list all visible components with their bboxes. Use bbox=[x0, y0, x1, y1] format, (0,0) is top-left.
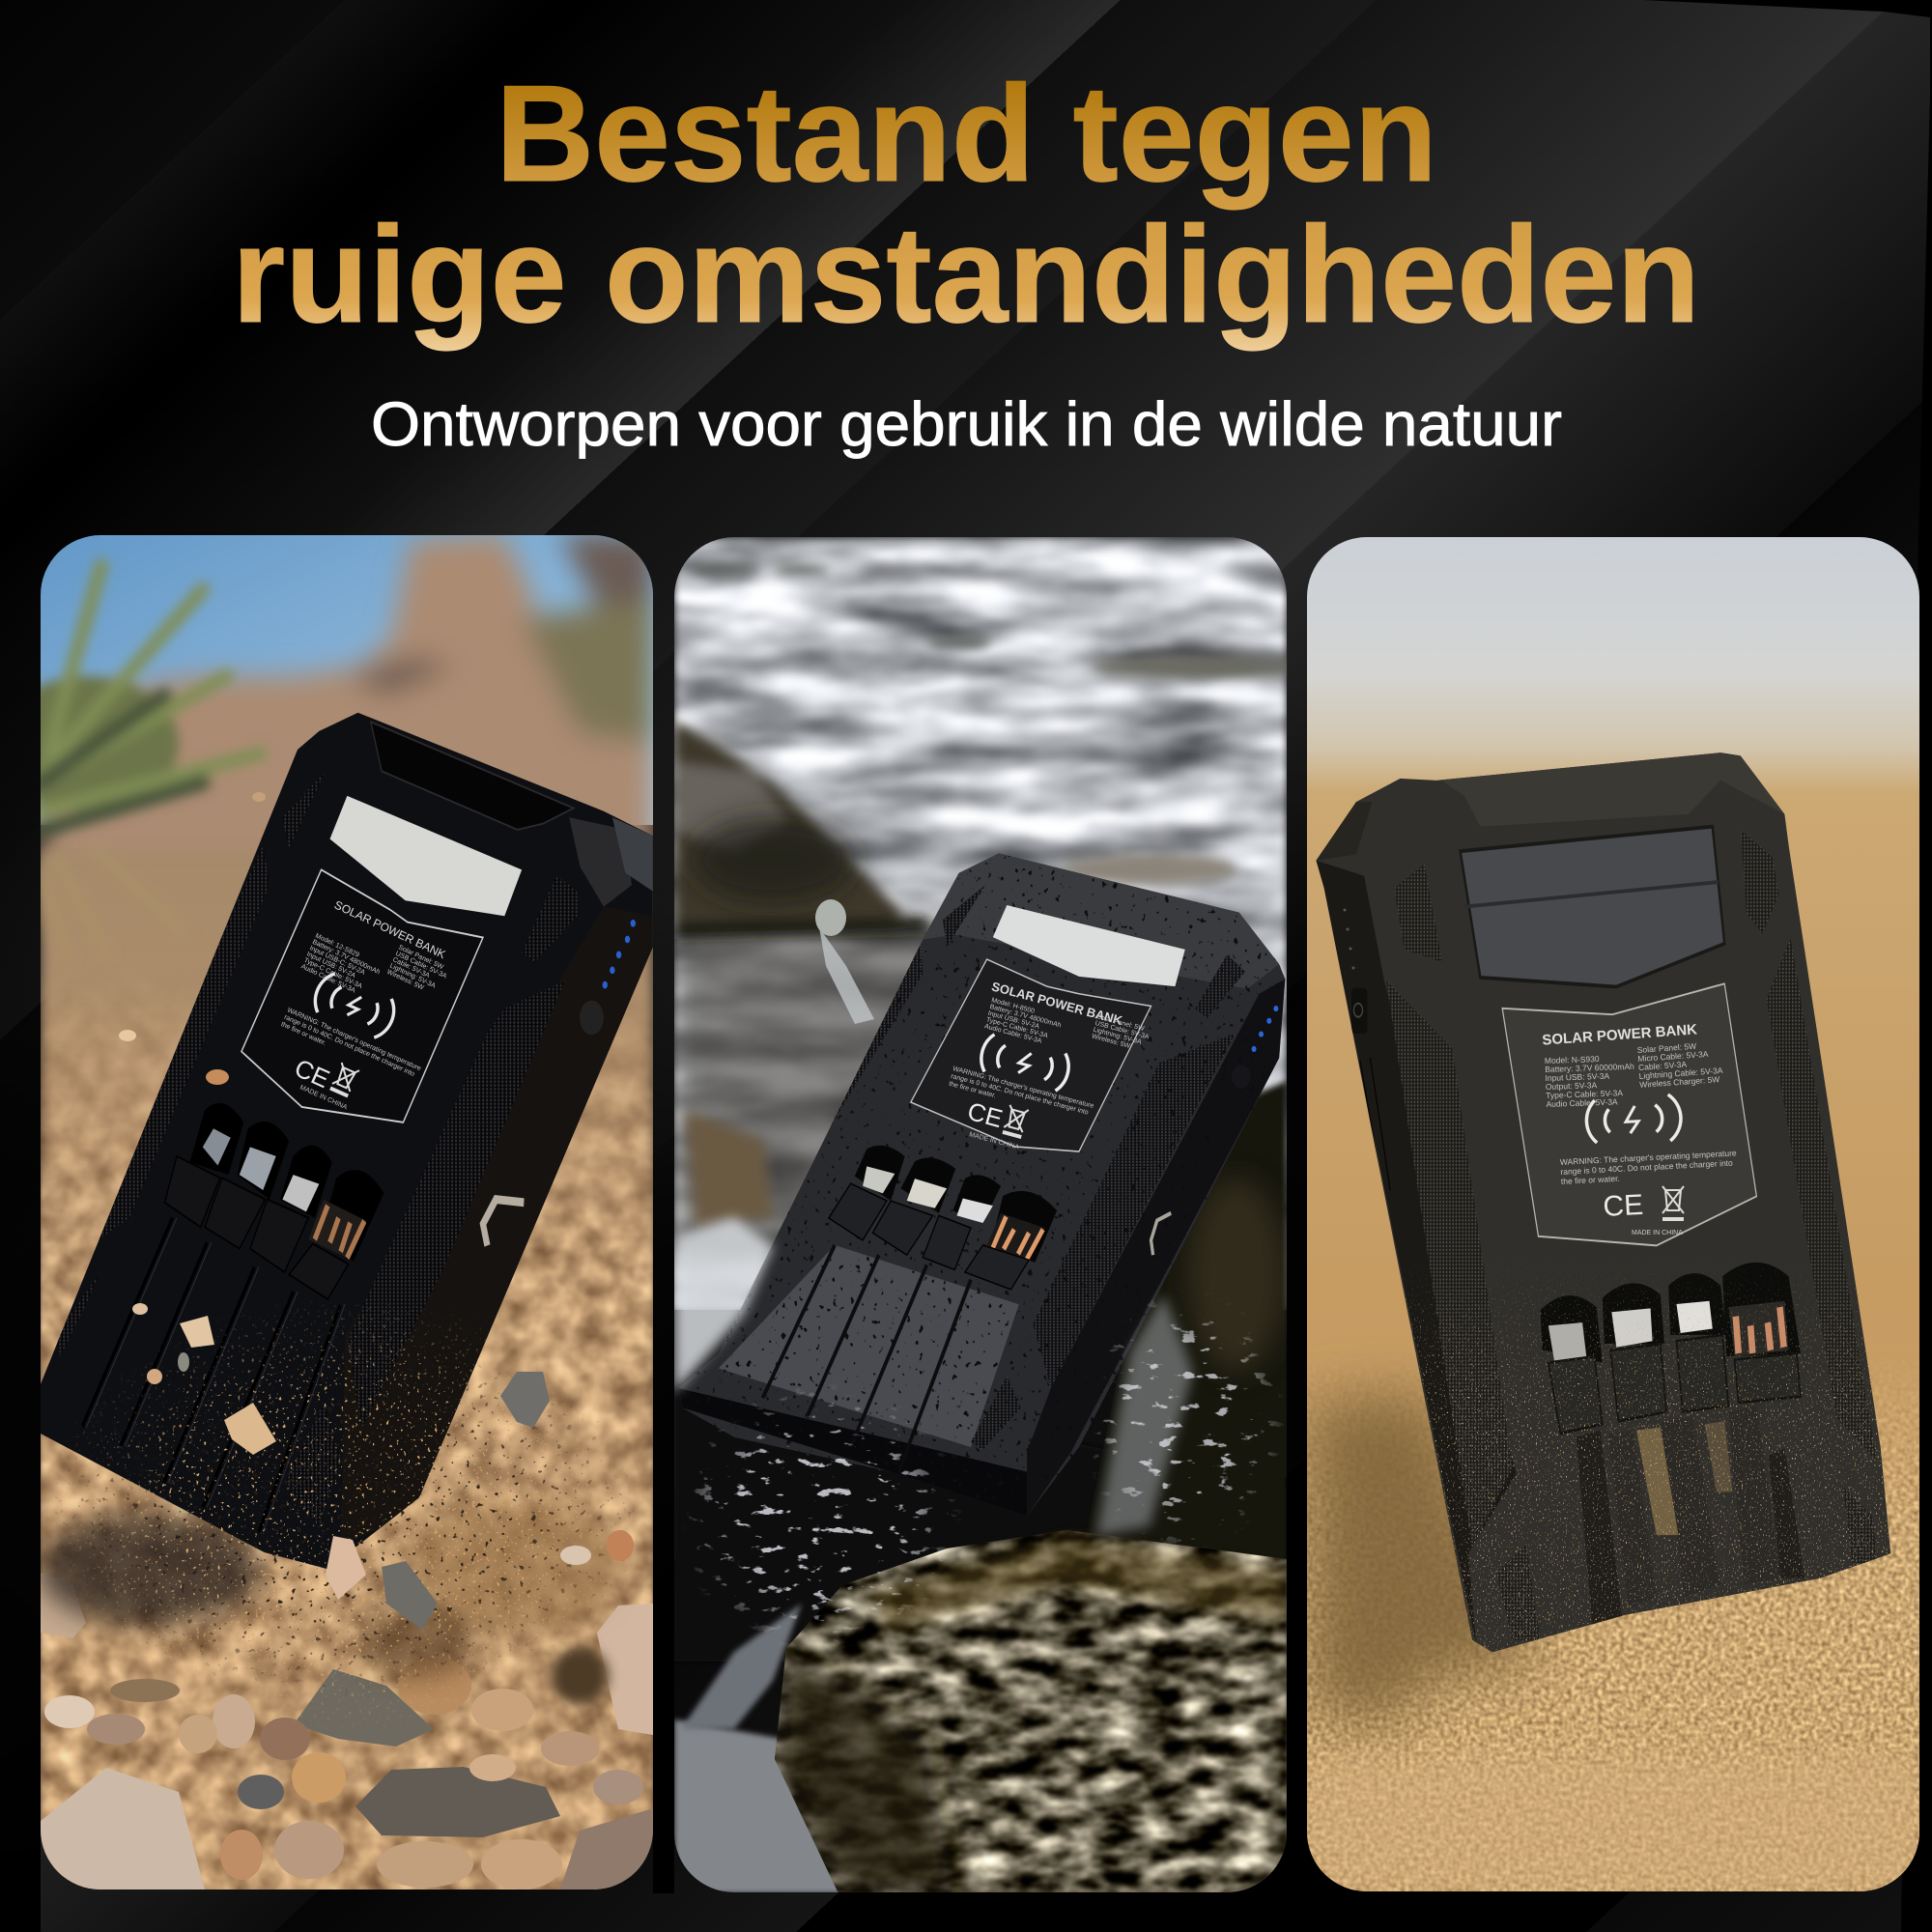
dotted grip panels bbox=[99, 846, 270, 1239]
title: ruige omstandigheden bbox=[232, 198, 1700, 352]
dark right rock bbox=[1082, 1082, 1287, 1584]
label text: panel 2: the fire or water. bbox=[948, 1081, 997, 1099]
status LEDs bbox=[603, 920, 636, 988]
label text: panel 2: range is 0 to 40C. Do not place the charger into bbox=[950, 1073, 1089, 1117]
label text: panel 3: Type-C Cable: 5V-3A bbox=[1546, 1088, 1623, 1100]
label text: panel 3: Solar Panel: 5W bbox=[1636, 1041, 1696, 1055]
label text: panel 3: Battery: 3.7V 60000mAh bbox=[1545, 1062, 1634, 1074]
lamp window bbox=[993, 905, 1185, 986]
top rail highlight bbox=[371, 722, 574, 830]
label text: panel 1: CE bbox=[291, 1053, 334, 1094]
sky bbox=[41, 535, 653, 825]
label text: panel 3: CE bbox=[1603, 1189, 1644, 1223]
label text: panel 2: Battery: 3.7V 48000mAh bbox=[989, 1004, 1062, 1029]
label text: panel 1: Model: 12-S829 bbox=[314, 932, 360, 959]
label text: panel 1: SOLAR POWER BANK bbox=[332, 898, 447, 961]
blurred dark water patches bbox=[691, 563, 1304, 885]
rock moss top bbox=[869, 1536, 1287, 1633]
label text: panel 3: Micro Cable: 5V-3A bbox=[1637, 1049, 1709, 1064]
power button bbox=[1351, 988, 1367, 1034]
gravel texture bbox=[41, 966, 653, 1893]
device: sandy power bank bbox=[1316, 750, 1896, 1659]
foreground stones bbox=[41, 1573, 653, 1889]
blurred mesa and hills bbox=[41, 533, 653, 927]
connector blocks bbox=[829, 1183, 887, 1240]
label text: panel 1: WARNING: The charger's operating temperature bbox=[286, 1007, 422, 1072]
dust cloud under device bbox=[39, 1497, 618, 1677]
label text: panel 2: Input USB: 5V-2A bbox=[987, 1010, 1040, 1031]
label text: panel 1 bbox=[280, 898, 451, 1111]
ground bbox=[41, 850, 653, 1893]
water droplets bbox=[667, 811, 1294, 1550]
connector blocks bbox=[1548, 1356, 1603, 1434]
foreground mossy rock bbox=[775, 1530, 1287, 1893]
rock water texture bbox=[773, 1526, 1287, 1893]
background: top and right black slivers bbox=[1642, 0, 1932, 1932]
label text: panel 1: Wireless: 5W bbox=[385, 969, 425, 992]
label text: panel 2: Lightning: 5V-3A bbox=[1093, 1027, 1143, 1046]
subtitle: Ontworpen voor gebruik in de wilde natuur bbox=[371, 389, 1562, 459]
sand shadow bbox=[1307, 1391, 1536, 1729]
cable slot arches bbox=[189, 1103, 243, 1175]
label text: panel 3: Lightning Cable: 5V-3A bbox=[1638, 1065, 1723, 1081]
label text: panel 3: the fire or water. bbox=[1561, 1174, 1620, 1186]
charge label plate bbox=[1502, 983, 1756, 1245]
label text: panel 1: USB Cable: 5V-3A bbox=[394, 951, 448, 980]
label text: panel 3: range is 0 to 40C. Do not place the charger into bbox=[1560, 1158, 1733, 1177]
charge label plate bbox=[242, 869, 483, 1122]
power button and hook bbox=[580, 1001, 604, 1035]
side slits bbox=[1360, 1058, 1440, 1535]
cable ribs bbox=[762, 1245, 971, 1472]
label text: panel 3: WARNING: The charger's operating temperature bbox=[1560, 1148, 1737, 1167]
label text: panel 3 bbox=[1542, 1021, 1738, 1236]
label text: panel 2: USB Cable: 5V-3A bbox=[1094, 1020, 1150, 1041]
charge label plate bbox=[911, 959, 1151, 1151]
title: Bestand tegen bbox=[496, 57, 1437, 211]
dark water under device bbox=[674, 1372, 1287, 1662]
panel: desert gravel photo bbox=[0, 533, 653, 1893]
label text: panel 2: Solar Panel: 5W bbox=[1095, 1013, 1146, 1033]
label text: panel 2: MADE IN CHINA bbox=[968, 1131, 1020, 1151]
title bbox=[232, 57, 1700, 352]
panel: sand photo bbox=[1307, 537, 1919, 1893]
label text: panel 3: Wireless Charger: 5W bbox=[1639, 1074, 1720, 1090]
label text: panel 2: CE bbox=[964, 1096, 1006, 1133]
water splashes bbox=[674, 899, 1287, 1652]
LED dots on side bbox=[1343, 908, 1354, 970]
sand foreground texture bbox=[1307, 1352, 1919, 1893]
background: dark margins between the photos bbox=[0, 541, 1307, 1932]
label text: panel 1: Input USB-C: 5V-2A bbox=[308, 945, 366, 977]
label text: panel 3: Audio Cable: 5V-3A bbox=[1546, 1096, 1618, 1109]
device: rugged power bank tilted bbox=[41, 713, 653, 1569]
flying debris: specks and stones bbox=[41, 792, 653, 1739]
label text: panel 1: Cable: 5V-3A bbox=[391, 956, 431, 980]
label text: panel 2: WARNING: The charger's operating temperature bbox=[952, 1065, 1094, 1110]
label text: panel 3: MADE IN CHINA bbox=[1632, 1230, 1683, 1236]
label text: panel 2: Audio Cable: 5V-3A bbox=[983, 1023, 1042, 1045]
blurred sky and beach bbox=[1307, 537, 1919, 1891]
label text: panel 1: Input USB: 5V-2A bbox=[305, 952, 356, 980]
blurred wet rock bbox=[674, 720, 927, 1227]
label text: panel 1: MADE IN CHINA bbox=[298, 1084, 349, 1111]
label text: panel 1: Lightning: 5V-3A bbox=[388, 963, 437, 990]
cable ribs bbox=[1577, 1431, 1623, 1628]
label text: panel 3: SOLAR POWER BANK bbox=[1542, 1021, 1698, 1049]
label text: panel 1: Audio Cable: 5V-3A bbox=[299, 963, 356, 994]
connector blocks bbox=[165, 1156, 220, 1227]
side face bbox=[1316, 861, 1517, 1646]
slot arches bbox=[1541, 1295, 1603, 1363]
panel: water splash photo bbox=[667, 537, 1304, 1893]
label text: panel 3: Model: N-S930 bbox=[1545, 1054, 1600, 1065]
darker lower stream bbox=[674, 918, 1003, 1265]
sand specks on device bbox=[1405, 1258, 1896, 1659]
yucca plant bbox=[41, 552, 270, 902]
label text: panel 2: Type-C Cable: 5V-3A bbox=[985, 1016, 1049, 1039]
label text: panel 3: Cable: 5V-3A bbox=[1638, 1059, 1688, 1072]
slot arches bbox=[855, 1146, 905, 1201]
solar panel bbox=[1461, 827, 1724, 986]
label text: panel 2: Model: H-8500 bbox=[990, 997, 1036, 1015]
dotted grips bbox=[1386, 980, 1513, 1548]
label text: panel 1: Type-C Cable: 5V-3A bbox=[302, 957, 363, 990]
label text: panel 2: Wireless: 5W bbox=[1091, 1033, 1131, 1050]
connectors bbox=[203, 1128, 231, 1166]
lamp window bbox=[329, 796, 522, 916]
top corner chunk bbox=[569, 817, 632, 907]
label text: panel 3: Output: 5V-3A bbox=[1546, 1080, 1598, 1092]
lower-left stream bbox=[674, 1719, 850, 1893]
label text: panel 1: the fire or water. bbox=[280, 1021, 327, 1047]
rock shadow side bbox=[775, 1648, 956, 1893]
label text: panel 2: SOLAR POWER BANK bbox=[990, 979, 1124, 1028]
connectors bbox=[1548, 1322, 1586, 1361]
label text: panel 1: Battery: 3.7V 48000mAh bbox=[311, 939, 381, 976]
blurred lower sand tone bbox=[1307, 1758, 1919, 1893]
device: wet power bank bbox=[667, 811, 1294, 1550]
status LEDs bbox=[1252, 1006, 1278, 1052]
cable ribs bbox=[82, 1218, 341, 1532]
side face bbox=[379, 916, 653, 1528]
blurred rushing water bbox=[674, 537, 1287, 1310]
label text: panel 3: Input USB: 5V-3A bbox=[1545, 1071, 1610, 1083]
label text: panel 1: Solar Panel: 5W bbox=[397, 944, 444, 971]
label text: panel 1: range is 0 to 40C. Do not place the charger into bbox=[283, 1014, 415, 1078]
connectors bbox=[863, 1166, 895, 1193]
rock moss mottling bbox=[691, 816, 855, 903]
label text: panel 2 bbox=[948, 979, 1151, 1151]
